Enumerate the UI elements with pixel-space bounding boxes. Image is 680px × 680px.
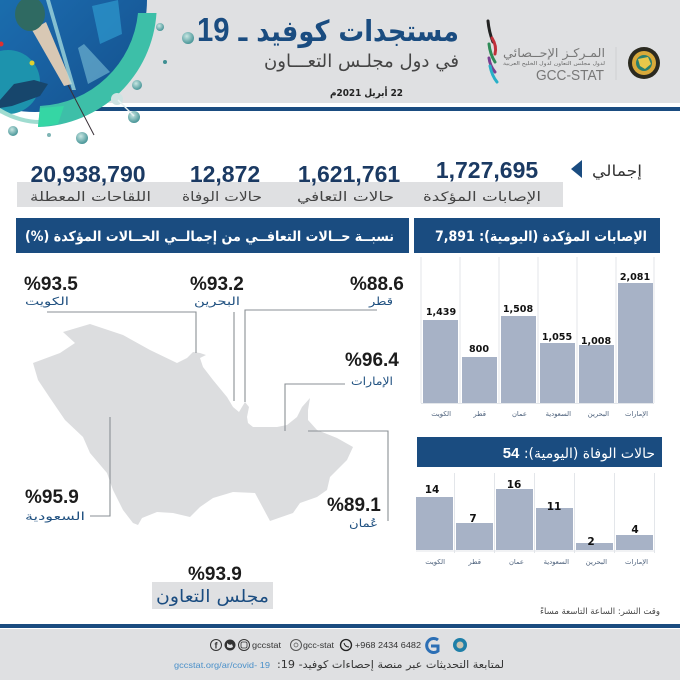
bar: Qatar	[462, 344, 497, 418]
bar: Oman: عمان	[512, 410, 527, 418]
bar: Qatar: قطر	[467, 558, 481, 566]
bar: Kuwait: الكويت	[425, 558, 445, 566]
panel heading: daily deaths	[417, 437, 662, 467]
bar chart: daily cases	[421, 257, 654, 418]
bar: UAE	[616, 524, 653, 566]
panel: headline totals	[17, 157, 563, 207]
callout: Kuwait: %93.5	[24, 274, 78, 295]
icon: linkedin handle	[290, 640, 302, 650]
icon: GCC emblem	[616, 47, 660, 80]
icon: facebook	[210, 640, 222, 650]
stat: deaths	[182, 161, 262, 205]
logo small line: لدول مجلس التعاون لدول الخليج العربية	[503, 61, 606, 67]
stat: vaccines: 20,938,790	[30, 161, 146, 187]
stat: deaths: 12,872	[190, 161, 260, 187]
bar: Saudi Arabia: السعودية	[546, 410, 571, 418]
callout: Bahrain: البحرين	[194, 295, 240, 308]
map: GCC countries	[33, 324, 353, 525]
total text: إجمالي	[592, 162, 642, 181]
bar: UAE: 2,081	[620, 272, 650, 283]
footer contacts	[210, 638, 467, 652]
phone number: +968 2434 6482	[355, 640, 421, 650]
bar: Saudi Arabia: السعودية	[544, 558, 569, 566]
publication time note: وقت النشر: الساعة التاسعة مساءً	[540, 606, 660, 617]
bar chart: daily deaths	[416, 473, 654, 566]
stat: recovered: 1,621,761	[298, 161, 400, 187]
bar: Oman	[501, 304, 536, 418]
callout: Kuwait: الكويت	[25, 295, 69, 308]
callout: Saudi Arabia: السعودية	[25, 510, 85, 523]
bar: Kuwait: الكويت	[431, 410, 451, 418]
callout: GCC total: مجلس التعاون	[156, 587, 269, 607]
logo ribbon	[488, 21, 497, 82]
bar: Bahrain: البحرين	[588, 410, 609, 418]
callout: UAE: الإمارات	[351, 375, 393, 388]
callout: UAE	[285, 350, 399, 431]
icon: arrow	[571, 160, 582, 178]
stat: deaths: حالات الوفاة	[182, 190, 262, 205]
bar: Kuwait	[423, 307, 458, 418]
callout: Bahrain: %93.2	[190, 274, 244, 295]
callout: Oman: %89.1	[327, 495, 381, 516]
logo: GCC-STAT	[488, 21, 606, 84]
bar: UAE	[618, 272, 653, 418]
callout: Oman	[308, 431, 388, 530]
stat: confirmed	[423, 157, 541, 205]
stat: recovered	[297, 161, 400, 205]
bar: UAE: 4	[631, 524, 639, 536]
callout: Saudi Arabia: %95.9	[25, 487, 79, 508]
title: مستجدات كوفيد ـ 19	[197, 11, 459, 48]
bar: Kuwait	[416, 484, 453, 566]
bar: Qatar: 800	[469, 344, 489, 355]
bar: Kuwait: 1,439	[426, 307, 456, 318]
icon: blue logo	[427, 638, 438, 652]
bar: Bahrain	[576, 536, 613, 566]
panel heading: recovery rate: نسبــة حــالات التعافــي من إجمالــي الحــالات المؤكدة (%)	[25, 229, 394, 245]
bar: Qatar: قطر	[472, 410, 486, 418]
stat: confirmed: 1,727,695	[436, 157, 538, 183]
stat: vaccines	[30, 161, 151, 205]
panel heading: recovery rate	[16, 218, 409, 253]
header band	[0, 0, 680, 111]
icon: whatsapp	[340, 640, 352, 650]
panel heading: daily cases: الإصابات المؤكدة (اليومية): 7,891	[435, 229, 647, 245]
bar: Bahrain: 2	[587, 536, 595, 548]
bar: Oman: 16	[507, 479, 521, 491]
callout: Kuwait	[24, 274, 196, 353]
bar: UAE: الإمارات	[625, 558, 648, 566]
logo Arabic name: المـركـز الإحــصائي	[503, 46, 605, 61]
bar: Oman: 1,508	[503, 304, 533, 315]
callout: UAE: %96.4	[345, 350, 399, 371]
bar: Kuwait: 14	[425, 484, 439, 496]
bar: Bahrain: البحرين	[586, 558, 607, 566]
bar: Qatar: 7	[469, 513, 477, 525]
panel heading: daily deaths: حالات الوفاة (اليومية): 54	[503, 445, 655, 462]
bar: Qatar	[456, 513, 493, 566]
callout: GCC total	[152, 564, 273, 609]
bar: Bahrain	[579, 336, 614, 418]
footer link line: لمتابعة التحديثات عبر منصة إحصاءات كوفيد- 19:	[277, 659, 504, 671]
stat: recovered: حالات التعافي	[297, 190, 394, 205]
callout: Qatar: قطر	[368, 295, 393, 308]
callout: GCC total: %93.9	[188, 564, 242, 585]
subtitle: في دول مجلـس التعـــاون	[264, 51, 459, 72]
icon: facebook: f	[214, 640, 218, 650]
illustration: virus and vaccine circle	[0, 0, 194, 144]
handle gccstat: gccstat	[252, 640, 282, 650]
stat: vaccines: اللقاحات المعطلة	[30, 190, 151, 205]
handle gcc-stat: gcc-stat	[303, 640, 335, 650]
bar: Saudi Arabia	[540, 332, 575, 418]
date: 22 أبريل 2021م	[330, 86, 403, 99]
bar: Oman: عمان	[509, 558, 524, 566]
footer link line	[174, 659, 504, 671]
stat: confirmed: الإصابات المؤكدة	[423, 190, 541, 205]
panel heading: daily cases	[414, 218, 660, 253]
callout: Saudi Arabia	[25, 417, 110, 523]
callout: Bahrain	[190, 274, 244, 401]
logo latin name: GCC-STAT	[536, 68, 604, 84]
footer band	[0, 624, 680, 680]
bar: Saudi Arabia: 11	[547, 501, 561, 513]
icon: round seal	[453, 638, 467, 652]
callout: Qatar	[245, 274, 404, 402]
callout: Oman: عُمان	[349, 517, 378, 530]
bar: Saudi Arabia	[536, 501, 573, 566]
bar: Oman	[496, 479, 533, 566]
bar: Saudi Arabia: 1,055	[542, 332, 572, 343]
icon: twitter	[224, 640, 236, 650]
callout: Qatar: %88.6	[350, 274, 404, 295]
footer link line: gccstat.org/ar/covid- 19	[174, 660, 270, 670]
bar: Bahrain: 1,008	[581, 336, 611, 347]
bar: UAE: الإمارات	[625, 410, 648, 418]
icon: instagram	[238, 640, 250, 650]
total label	[571, 160, 642, 181]
